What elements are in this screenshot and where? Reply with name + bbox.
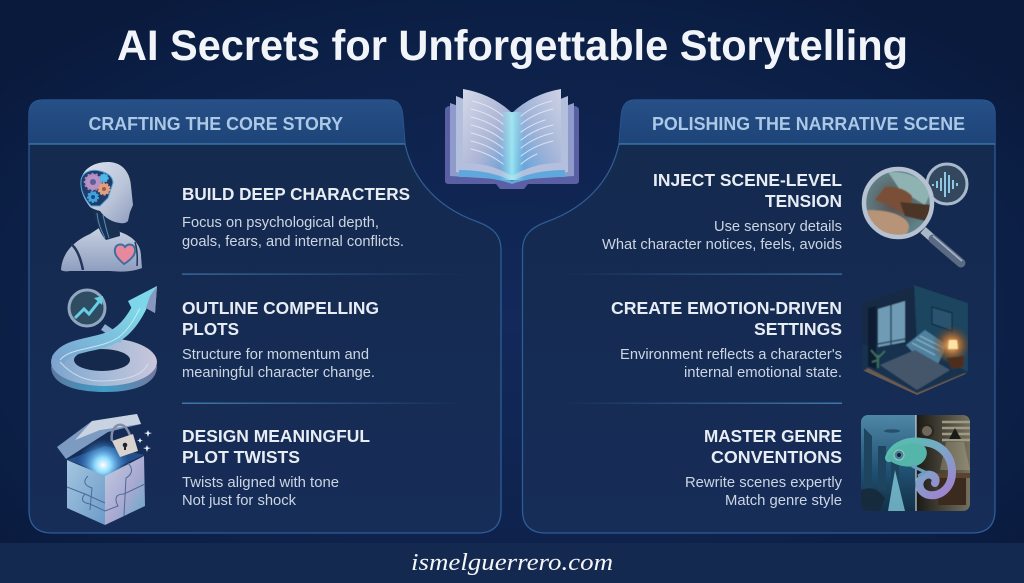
- gears: [85, 174, 110, 202]
- description: create emotion-driven settings: Environment reflects a character's: [620, 347, 842, 363]
- title: AI Secrets for Unforgettable Storytelling: [117, 22, 908, 70]
- heading: create emotion-driven settings: SETTINGS: [754, 319, 842, 339]
- description: design meaningful plot twists: [182, 475, 339, 509]
- item: master genre conventions: [685, 415, 970, 511]
- icon: chameleon split scene: [861, 415, 970, 511]
- item: inject scene-level tension: [602, 164, 967, 263]
- description: build deep characters: goals, fears, and internal conflicts.: [182, 234, 404, 250]
- description: create emotion-driven settings: [620, 347, 842, 381]
- puzzle seams: [67, 463, 145, 516]
- heading: master genre conventions: CONVENTIONS: [711, 447, 842, 467]
- heading: inject scene-level tension: INJECT SCENE-LEVEL: [653, 170, 842, 190]
- heading: polishing the narrative scene: POLISHING THE NARRATIVE SCENE: [652, 113, 965, 134]
- description: master genre conventions: [685, 475, 843, 509]
- description: design meaningful plot twists: Twists aligned with tone: [182, 475, 339, 491]
- heading: create emotion-driven settings: CREATE EMOTION-DRIVEN: [611, 298, 842, 318]
- chameleon: [887, 442, 952, 495]
- description: outline compelling plots: Structure for momentum and: [182, 347, 369, 363]
- heading: build deep characters: BUILD DEEP CHARACTERS: [182, 184, 410, 204]
- description: master genre conventions: Rewrite scenes expertly: [685, 475, 843, 491]
- item: create emotion-driven settings: [611, 283, 972, 397]
- small chart circle: [69, 290, 105, 326]
- item: design meaningful plot twists: [57, 414, 370, 525]
- heading: outline compelling plots: [182, 298, 379, 339]
- heading: outline compelling plots: PLOTS: [182, 319, 239, 339]
- item: outline compelling plots: [51, 286, 379, 392]
- panel header: polishing: [615, 100, 995, 144]
- icon: robot head with gears and heart: [61, 162, 142, 272]
- description: outline compelling plots: meaningful character change.: [182, 365, 375, 381]
- heading: inject scene-level tension: [653, 170, 842, 211]
- description: master genre conventions: Match genre style: [725, 493, 842, 509]
- panel header: crafting: [29, 100, 409, 144]
- heading: outline compelling plots: OUTLINE COMPELLING: [182, 298, 379, 318]
- heading: crafting the core story: CRAFTING THE CORE STORY: [88, 113, 344, 134]
- description: build deep characters: [182, 215, 404, 250]
- description: inject scene-level tension: What character notices, feels, avoids: [602, 237, 842, 253]
- heading: design meaningful plot twists: DESIGN MEANINGFUL: [182, 426, 370, 446]
- icon: looping plot arrow: [51, 286, 157, 392]
- book text lines: [471, 101, 553, 164]
- footer bar: [0, 543, 1024, 583]
- heading: create emotion-driven settings: [611, 298, 842, 339]
- dividers: [182, 274, 842, 404]
- heading: design meaningful plot twists: [182, 426, 370, 467]
- description: build deep characters: Focus on psychological depth,: [182, 215, 379, 231]
- item: build deep characters: [61, 162, 410, 272]
- padlock: [112, 425, 138, 457]
- heading: design meaningful plot twists: PLOT TWISTS: [182, 447, 300, 467]
- description: outline compelling plots: [182, 347, 375, 381]
- heart: [115, 245, 135, 264]
- heading: master genre conventions: MASTER GENRE: [704, 426, 842, 446]
- heading: inject scene-level tension: TENSION: [765, 191, 842, 211]
- icon: open book: [445, 89, 579, 189]
- description: design meaningful plot twists: Not just for shock: [182, 493, 297, 509]
- description: inject scene-level tension: [602, 219, 842, 253]
- icon: isometric moody room: [860, 283, 972, 397]
- description: inject scene-level tension: Use sensory details: [714, 219, 842, 235]
- panel: polishing the narrative scene: [522, 100, 995, 533]
- panel: crafting the core story: [29, 100, 501, 533]
- description: create emotion-driven settings: internal emotional state.: [684, 365, 842, 381]
- heading: master genre conventions: [704, 426, 842, 467]
- icon: magnifier with hands and sound wave: [864, 164, 967, 263]
- icon: puzzle box with lock: [57, 414, 152, 525]
- sparkles: [137, 430, 152, 452]
- footer text: website: ismelguerrero.com: [411, 550, 613, 576]
